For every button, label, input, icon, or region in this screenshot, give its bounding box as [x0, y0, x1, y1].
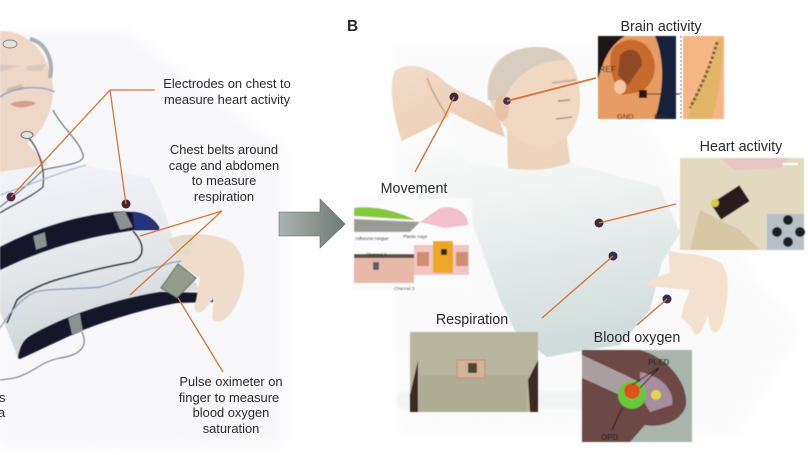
neck electrode: [21, 132, 33, 138]
label: pulse oximeter: [179, 374, 283, 436]
panel: A sleeping patient: [0, 30, 291, 447]
inset: heart activity photo: [680, 158, 805, 250]
inset: blood oxygen fingertip photo: OPD: [601, 433, 619, 442]
callout lines A: [11, 90, 223, 372]
label: pulse oximeter: finger to measure: [179, 390, 279, 405]
inset: brain activity ear photo: [598, 36, 680, 121]
electrode dots: [6, 192, 130, 208]
label: chest belts: to measure: [192, 173, 256, 188]
label: electrodes: Electrodes on chest to: [163, 76, 291, 91]
inset: movement sensors: Adhesive tongue: [355, 236, 389, 241]
label: pulse oximeter: blood oxygen: [193, 405, 269, 420]
raised arm: [392, 66, 505, 142]
hand: [647, 250, 728, 334]
sensor dots: [450, 92, 672, 304]
belt blue end: [132, 212, 159, 230]
label: electrodes: [163, 76, 291, 107]
inset: blood oxygen fingertip photo: [582, 350, 692, 442]
lower sheet band: [398, 392, 598, 408]
chest belt upper: [0, 212, 159, 270]
label: pulse oximeter: Pulse oximeter on: [179, 374, 283, 389]
inset: brain activity ear photo: REF: [599, 64, 616, 74]
label: pulse oximeter: saturation: [203, 421, 259, 436]
inset: movement sensors: Plastic cage: [403, 234, 428, 239]
label: movement: Movement: [381, 181, 447, 197]
inset: brain activity ear photo: REF: [654, 112, 669, 121]
inset: electrode tattoo closeup: [681, 36, 724, 119]
pulse oximeter: [161, 264, 196, 298]
chest belt lower: [18, 292, 213, 359]
arrow: [279, 199, 345, 248]
inset: respiration shirt photo: [410, 332, 538, 412]
hand: [168, 235, 244, 322]
belt sensor lower: [68, 313, 83, 335]
label: chest belts: cage and abdomen: [169, 158, 279, 173]
bed sheet: [0, 30, 285, 447]
belt sensors upper: [33, 211, 133, 250]
label: respiration: Respiration: [436, 312, 508, 328]
label: brain activity: Brain activity: [620, 19, 702, 35]
label: electrodes: measure heart activity: [164, 92, 291, 107]
label: chest belts: [169, 142, 279, 204]
EEG electrodes and wires: [0, 39, 193, 380]
label: chest belts: respiration: [194, 189, 254, 204]
label: heart activity: Heart activity: [700, 139, 783, 155]
arm fold: [427, 78, 447, 116]
heading: B: B: [347, 18, 358, 35]
label: blood oxygen: Blood oxygen: [594, 330, 680, 346]
head electrode: [3, 40, 17, 48]
background sheet: [395, 45, 800, 435]
inset: blood oxygen fingertip photo: PLED: [648, 358, 670, 367]
patient shirt: [0, 166, 200, 358]
person shirt: [402, 118, 680, 357]
inset: movement sensors: Channel 2: [366, 252, 387, 257]
inset: movement sensors: [353, 198, 472, 291]
callout lines B: [415, 78, 676, 325]
inset: movement sensors: Channel 3: [394, 286, 415, 291]
label: chest belts: Chest belts around: [170, 142, 278, 157]
patient head: [0, 31, 53, 172]
label: cropped text: [0, 390, 6, 420]
head and neck: [488, 47, 580, 170]
inset: brain activity ear photo: GND: [617, 112, 634, 121]
panel: B wearable person: [353, 19, 805, 442]
